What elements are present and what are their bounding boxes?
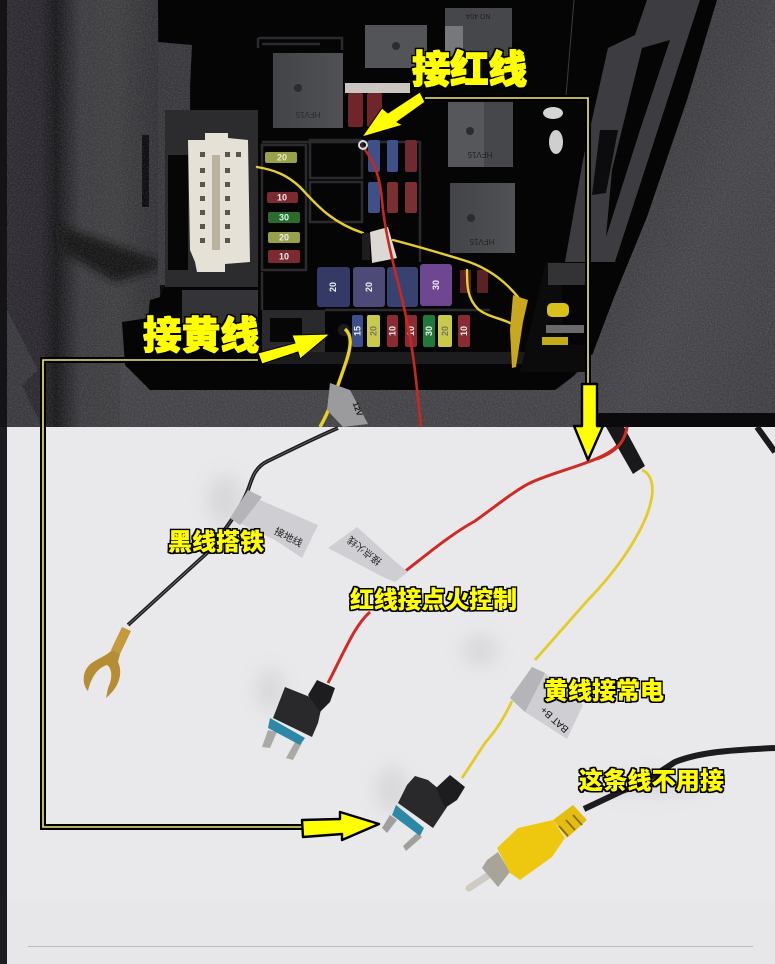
arrow: right to fuse tap bbox=[302, 812, 379, 840]
taped wire bundle bbox=[362, 227, 397, 263]
arrow: down to junction bbox=[574, 384, 603, 460]
fuses: 20 bbox=[277, 152, 287, 162]
black connector housing bbox=[165, 110, 258, 287]
label: 这条线不用接: 这条线不用接 bbox=[579, 767, 724, 795]
relay: right lower: HFV15 bbox=[469, 237, 494, 246]
icon: white OBD connector bbox=[188, 133, 250, 272]
label tag: ignition: 接点火线 bbox=[345, 533, 384, 568]
label tag: 12V bbox=[327, 383, 368, 427]
fuses: 15 bbox=[352, 326, 362, 336]
relay: top centre bbox=[365, 25, 427, 68]
panel: fuse box photo bbox=[0, 0, 775, 427]
red wire in fuse box bbox=[363, 147, 421, 427]
fuse tap ring terminal bbox=[359, 141, 367, 149]
red wire overlap on junction bbox=[597, 427, 627, 459]
fuse tap: battery bbox=[382, 775, 465, 851]
relay: right lower bbox=[450, 183, 515, 253]
label tag: 12V: 12V bbox=[351, 401, 364, 418]
label: 红线接点火控制: 红线接点火控制 bbox=[350, 586, 517, 614]
arrow: to red wire fuse bbox=[362, 92, 425, 137]
right bracket and hardware bbox=[520, 0, 585, 372]
fuses: 30 bbox=[279, 212, 289, 222]
fuse tap: ignition bbox=[262, 680, 335, 760]
guide: red line to junction bbox=[425, 98, 588, 385]
icon: fork terminal bbox=[84, 627, 131, 698]
relay: left: HFV15 bbox=[295, 110, 320, 119]
fuses: 20 bbox=[364, 282, 374, 292]
icon: yellow RCA plug bbox=[469, 805, 587, 888]
fuses: 20 bbox=[368, 326, 378, 336]
relay: left bbox=[273, 53, 343, 128]
label tag: ignition bbox=[328, 527, 408, 582]
heading label: 接黄线: 接黄线 bbox=[143, 315, 259, 358]
heading label: 接红线: 接红线 bbox=[412, 49, 527, 92]
label tag: BAT B+ bbox=[510, 667, 583, 739]
arrow: to yellow wire fuse bbox=[258, 334, 330, 364]
label tag: ground: 接地线 bbox=[272, 525, 305, 550]
fuses: 30 bbox=[424, 326, 434, 336]
fuses: 10 bbox=[279, 252, 289, 262]
left dark edge bbox=[0, 427, 7, 964]
fuses: 10 bbox=[277, 192, 287, 202]
fuses: 10 bbox=[388, 326, 398, 336]
dashboard trim left bbox=[7, 0, 165, 427]
dashboard trim right bbox=[565, 0, 775, 413]
fuse box frame bbox=[258, 38, 552, 364]
yellow wire in fuse box bbox=[257, 167, 518, 323]
yellow tape bbox=[510, 295, 528, 368]
fuses: 10 bbox=[459, 326, 469, 336]
black ground wire bbox=[128, 428, 338, 625]
red ignition wire bbox=[328, 427, 627, 683]
surface grain bbox=[7, 0, 775, 427]
yellow wire bbox=[462, 470, 652, 778]
fuses: 20 bbox=[328, 282, 338, 292]
fuses: 20 bbox=[440, 326, 450, 336]
black heat shrink junction bbox=[606, 427, 645, 474]
black RCA cable bbox=[584, 748, 775, 809]
yellow tap wire bbox=[320, 324, 350, 427]
dark centre cavity bbox=[122, 0, 647, 390]
relay: top right bbox=[445, 8, 512, 57]
divider line bbox=[28, 946, 753, 947]
fuses: 30 bbox=[431, 280, 441, 290]
gray step beside connector bbox=[158, 42, 192, 285]
soft shadows bbox=[207, 474, 710, 814]
textured lower trim bbox=[120, 355, 595, 427]
label: 黄线接常电: 黄线接常电 bbox=[544, 678, 664, 705]
label tag: BAT B+: BAT B+ bbox=[539, 703, 571, 734]
relay: right upper bbox=[448, 102, 513, 167]
label tag: ground bbox=[230, 490, 318, 558]
fuses: 20 bbox=[279, 232, 289, 242]
label: 黑线搭铁: 黑线搭铁 bbox=[168, 529, 264, 556]
fuses: 10 bbox=[406, 326, 416, 336]
guide: yellow line to fuse tap bbox=[43, 360, 305, 827]
relay: right upper: HFV15 bbox=[467, 150, 492, 159]
fuses bbox=[265, 83, 488, 347]
relay: top right: NO 40A bbox=[465, 12, 490, 19]
relays bbox=[273, 8, 515, 253]
black bundle top right bbox=[757, 427, 775, 452]
